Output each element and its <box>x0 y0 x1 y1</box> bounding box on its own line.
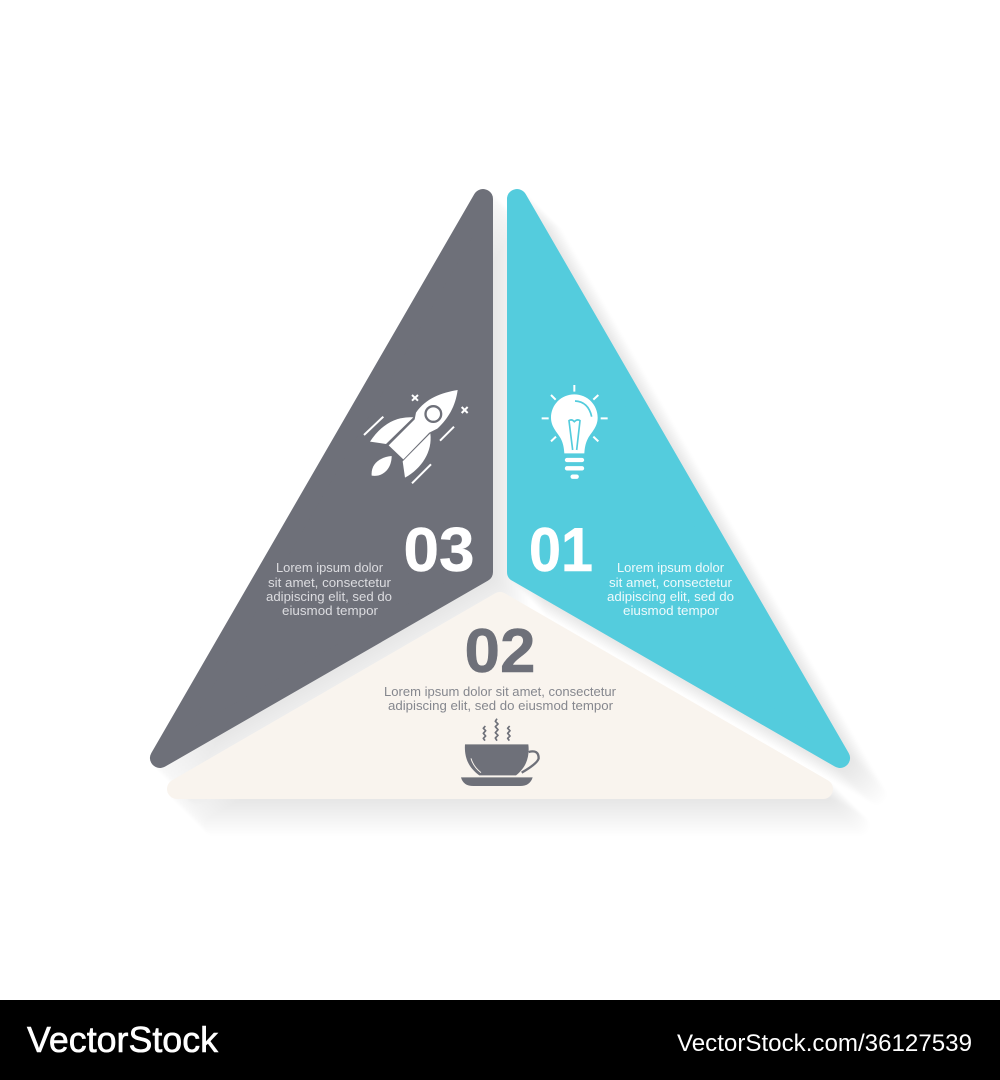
text block 03: eiusmod tempor <box>282 603 379 618</box>
teal triangle <box>517 199 840 758</box>
long shadows <box>163 202 876 825</box>
text block 02 <box>384 684 617 713</box>
number 03: 03 <box>404 516 474 585</box>
footer url: VectorStock.com/36127539 <box>677 1030 972 1057</box>
text block 03: adipiscing elit, sed do <box>266 589 392 604</box>
text block 01: Lorem ipsum dolor <box>617 560 725 575</box>
footer logo: VectorStock <box>27 1019 219 1060</box>
text block 01: eiusmod tempor <box>623 603 720 618</box>
icon: light bulb <box>542 385 608 477</box>
text block 01 <box>607 560 734 618</box>
icon: rocket <box>364 390 468 483</box>
footer bar <box>0 1000 1000 1080</box>
text block 03: Lorem ipsum dolor <box>276 560 384 575</box>
text block 02: Lorem ipsum dolor sit amet, consectetur <box>384 684 617 699</box>
panel: 01 teal segment <box>517 199 840 758</box>
text block 03 <box>266 560 392 618</box>
panel: 03 gray segment <box>160 199 483 758</box>
number 01: 01 <box>529 516 593 585</box>
cream triangle <box>177 602 823 789</box>
text block 03: sit amet, consectetur <box>268 575 392 590</box>
text block 01: sit amet, consectetur <box>609 575 733 590</box>
text block 02: adipiscing elit, sed do eiusmod tempor <box>388 698 614 713</box>
text block 01: adipiscing elit, sed do <box>607 589 734 604</box>
icon: coffee cup <box>461 719 539 786</box>
panel: 02 cream segment <box>177 602 823 789</box>
number 02: 02 <box>464 617 536 686</box>
gray triangle <box>160 199 483 758</box>
